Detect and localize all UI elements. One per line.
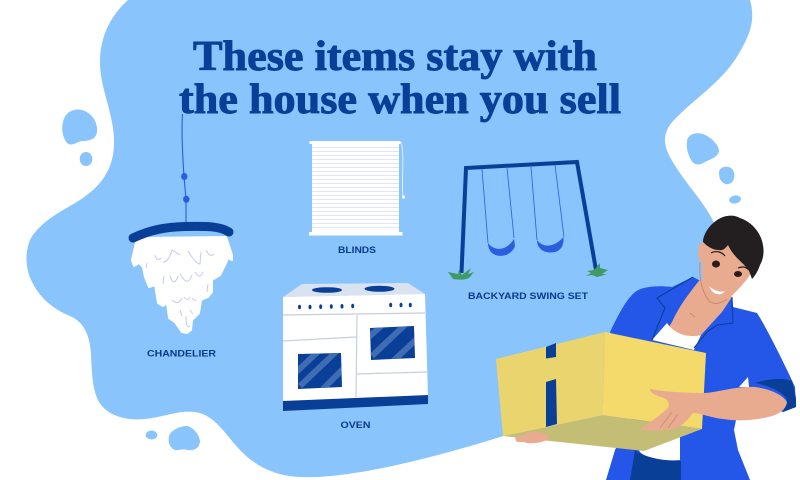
finger lines [660,412,678,428]
cardboard box [496,332,706,451]
grass right [586,263,608,277]
oven base [283,395,428,411]
chandelier cord and beads [181,114,190,224]
blinds cord [401,142,405,199]
white shirt [652,323,701,350]
lapels [652,277,733,348]
oven left window [298,353,342,389]
label: blinds: BLINDS [338,245,376,256]
title: These items stay with [193,34,597,80]
swing frame [462,162,596,273]
face features [690,252,749,317]
decorative droplets left [62,110,97,166]
lower shirt [636,435,680,460]
person holding box [496,216,796,480]
chandelier crystals [132,237,232,333]
jacket [606,277,796,480]
label: chandelier: CHANDELIER [147,348,216,360]
jacket cuff [755,379,796,412]
forearm and hand [640,387,787,431]
hand under box [515,432,550,443]
oven panel lines [283,313,427,397]
head [698,242,752,303]
item: oven [283,283,428,431]
neck and chest [667,280,732,337]
label: swing set: BACKYARD SWING SET [468,291,588,302]
item: swing set [448,162,608,302]
oven right window [370,326,415,360]
label: oven: OVEN [340,420,371,431]
white gap by arm [739,377,749,387]
blinds slats [309,141,402,236]
grass left [448,268,474,280]
hair [703,216,764,279]
item: blinds [309,141,405,256]
oven top [283,283,425,297]
swing ropes [482,165,564,243]
oven body [283,294,428,402]
title: the house when you sell [179,77,621,123]
decorative droplets bottom [146,426,200,450]
chandelier canopy [133,226,229,238]
item: chandelier [132,114,232,360]
oven knobs [298,303,412,309]
oven burners [312,286,394,293]
trousers [630,450,681,480]
title [179,34,621,123]
swing seats [488,237,564,256]
decorative droplets right [687,133,742,204]
